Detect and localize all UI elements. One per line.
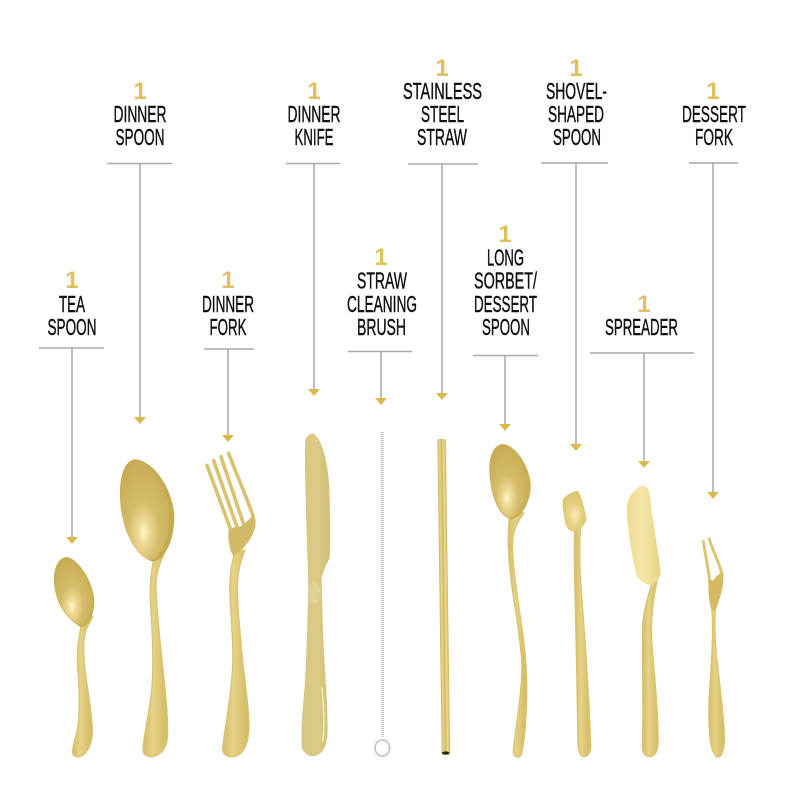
- callout: long sorbet dessert spoon: [473, 221, 538, 431]
- icon: shovel-shaped spoon: [562, 491, 591, 757]
- callout: long sorbet dessert spoon: LONG: [487, 244, 524, 270]
- callout: long sorbet dessert spoon: 1: [498, 221, 512, 248]
- callout: shovel-shaped spoon: 1: [569, 55, 583, 82]
- callout: straw cleaning brush: BRUSH: [357, 314, 406, 340]
- callout: dessert fork: [682, 78, 746, 499]
- callout: tea spoon: [39, 267, 104, 544]
- icon: stainless steel straw: [437, 439, 450, 755]
- callout: spreader: 1: [637, 291, 651, 318]
- callout: dinner spoon: [107, 78, 172, 424]
- callout: dessert fork: FORK: [695, 124, 733, 150]
- callout: long sorbet dessert spoon: DESSERT: [474, 291, 537, 317]
- icon: dinner fork: [207, 453, 256, 757]
- callout: tea spoon: SPOON: [48, 314, 96, 340]
- callout: dinner fork: FORK: [210, 314, 247, 340]
- callout: shovel-shaped spoon: SHAPED: [548, 101, 604, 127]
- icon: dinner knife: [301, 433, 330, 756]
- callout: straw cleaning brush: 1: [374, 244, 388, 271]
- callout: dinner spoon: SPOON: [116, 124, 164, 150]
- callout: long sorbet dessert spoon: SORBET/: [474, 268, 537, 294]
- callout: long sorbet dessert spoon: SPOON: [482, 314, 530, 340]
- icon: dinner spoon: [120, 459, 174, 757]
- callout: dinner knife: 1: [307, 78, 321, 105]
- callout: stainless steel straw: [403, 55, 482, 400]
- callout: shovel-shaped spoon: [541, 55, 608, 451]
- callout: stainless steel straw: STRAW: [417, 124, 467, 150]
- callout: dinner fork: [202, 267, 254, 442]
- callout: dinner knife: KNIFE: [294, 124, 334, 150]
- callout: spreader: [590, 291, 694, 468]
- icon: spreader: [627, 486, 661, 757]
- callout: shovel-shaped spoon: SHOVEL-: [546, 78, 607, 104]
- callout: straw cleaning brush: CLEANING: [347, 291, 417, 317]
- icon: long sorbet dessert spoon: [489, 444, 531, 757]
- callout: dinner knife: DINNER: [288, 101, 340, 127]
- callout: dessert fork: DESSERT: [682, 101, 746, 127]
- icon: straw cleaning brush: [375, 432, 390, 756]
- icon: tea spoon: [54, 557, 94, 757]
- callout: dinner spoon: 1: [133, 78, 147, 105]
- callout: shovel-shaped spoon: SPOON: [553, 124, 601, 150]
- callout: dinner fork: DINNER: [202, 291, 254, 317]
- callout: tea spoon: 1: [65, 267, 79, 294]
- callout: dinner fork: 1: [221, 267, 235, 294]
- callout: stainless steel straw: STAINLESS: [403, 78, 482, 104]
- callout: straw cleaning brush: [347, 244, 417, 405]
- callout: spreader: SPREADER: [605, 314, 678, 340]
- callout: stainless steel straw: 1: [435, 55, 449, 82]
- callout: dinner knife: [286, 78, 340, 396]
- callout: dessert fork: 1: [706, 78, 720, 105]
- callout: stainless steel straw: STEEL: [421, 101, 464, 127]
- callout: dinner spoon: DINNER: [114, 101, 166, 127]
- icon: dessert fork: [703, 539, 724, 757]
- callout: straw cleaning brush: STRAW: [357, 268, 407, 294]
- callout: tea spoon: TEA: [59, 291, 85, 317]
